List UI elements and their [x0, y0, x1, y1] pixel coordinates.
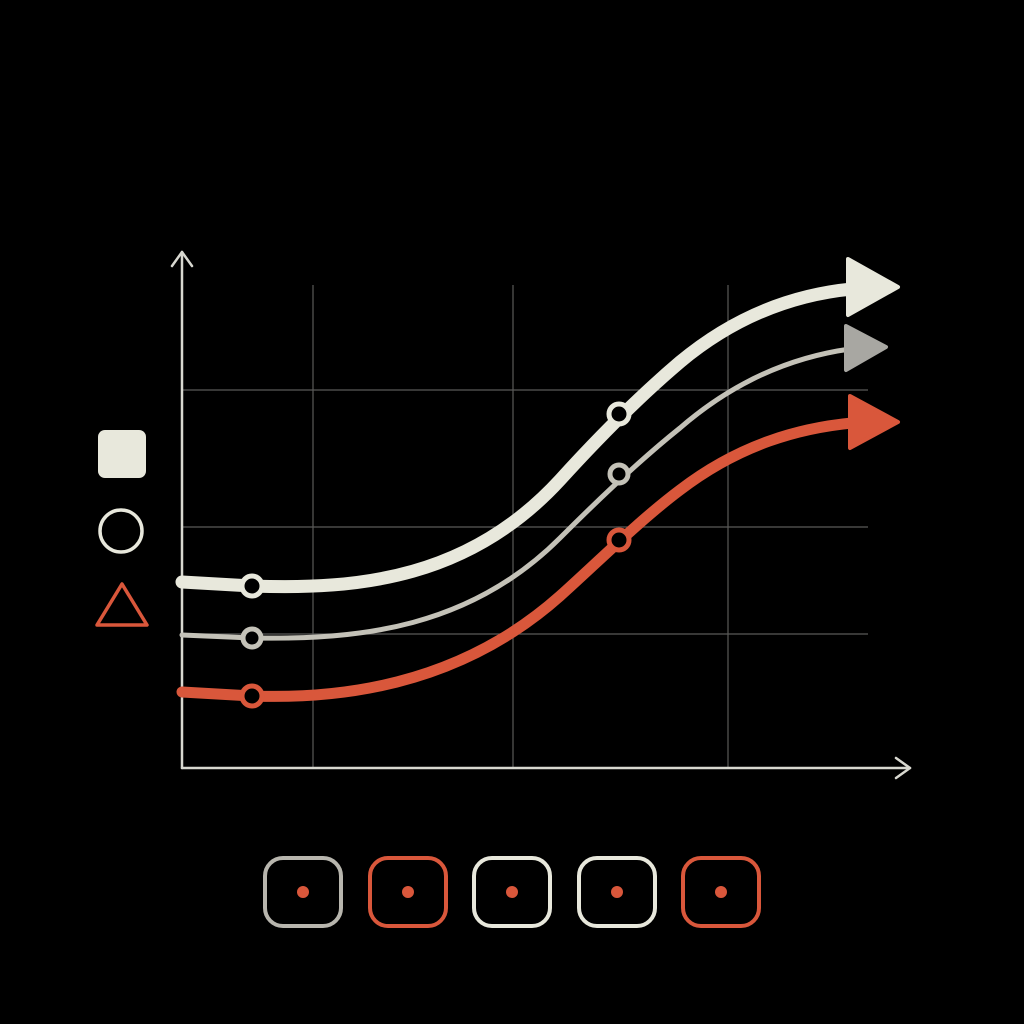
- line: cream series: [182, 259, 898, 596]
- icon: triangle: [97, 584, 147, 625]
- legend: [97, 430, 147, 625]
- icon: square: [98, 430, 146, 478]
- icon: circle: [100, 510, 142, 552]
- axes: [172, 252, 910, 778]
- button row: [265, 858, 759, 926]
- line: red series: [182, 396, 898, 706]
- line: gray series: [182, 326, 886, 647]
